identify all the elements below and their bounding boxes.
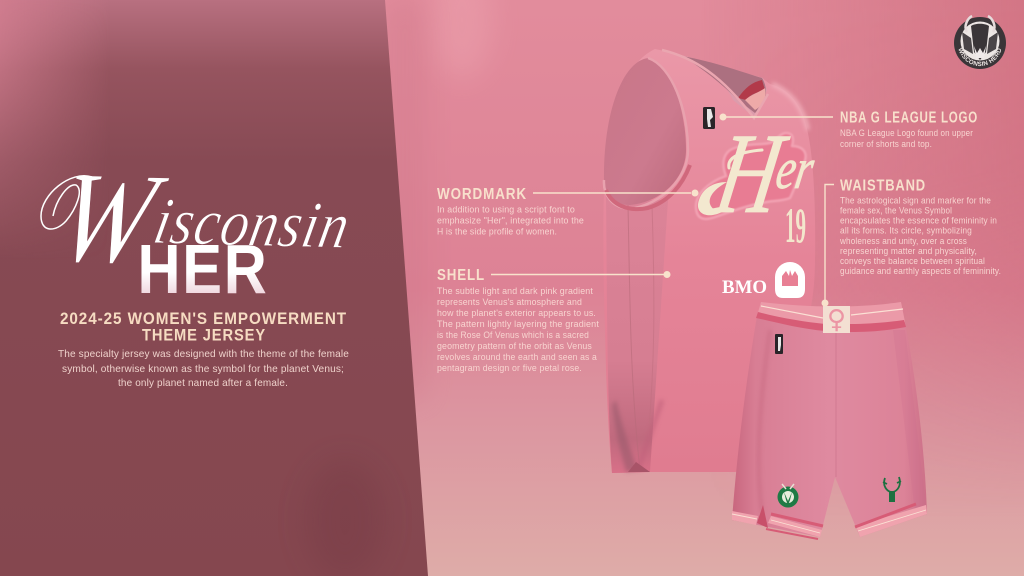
callout: shell: SHELL xyxy=(437,267,485,284)
collar xyxy=(655,49,767,118)
intro paragraph xyxy=(58,349,349,389)
shorts body xyxy=(732,316,927,537)
G League patch on jersey xyxy=(703,107,715,129)
Her wordmark: er xyxy=(772,137,819,202)
jersey hem shading xyxy=(612,400,638,472)
Bucks deer logo xyxy=(883,477,901,502)
jersey side panel xyxy=(606,190,668,473)
title: Wisconsin script: W xyxy=(46,146,176,291)
armhole xyxy=(604,58,686,205)
callout: shell xyxy=(437,267,599,373)
intro paragraph: symbol, otherwise known as the symbol for the planet Venus; xyxy=(62,364,344,375)
callout: waistband: female sex, the Venus Symbol xyxy=(840,206,952,216)
leader: wordmark xyxy=(533,190,698,196)
callout: G League logo xyxy=(840,110,978,149)
jersey xyxy=(603,49,824,473)
BMO sponsor: BMO xyxy=(722,277,767,298)
callout: G League logo: NBA G League Logo found on upper xyxy=(840,128,973,138)
jersey: 19 xyxy=(785,197,806,253)
leader: G League logo xyxy=(720,114,833,120)
Bucks round logo xyxy=(778,484,798,508)
callout: shell: The pattern lightly layering the gradient xyxy=(437,319,599,329)
callout: waistband xyxy=(839,178,1001,276)
right shoulder highlight xyxy=(772,84,808,130)
Her wordmark xyxy=(696,111,824,238)
team logo: Wisconsin Herd: WISCONSIN HERD xyxy=(958,48,1001,66)
panel: left dark intro panel xyxy=(0,0,428,576)
callout: waistband: conveys the balance between spiritual xyxy=(840,256,985,266)
shorts xyxy=(732,302,927,539)
callout: waistband: all its forms. Its circle, symbolizing xyxy=(840,226,972,236)
callout: shell: geometry pattern of the orbit as Venus xyxy=(437,341,592,351)
callout: waistband: wholeness and unity, over a cross xyxy=(839,236,967,246)
callout: waistband: encapsulates the essence of femininity in xyxy=(840,216,997,226)
callout: G League logo: NBA G LEAGUE LOGO xyxy=(840,110,978,127)
callout: shell: is the Rose Of Venus which is a sacred xyxy=(437,330,589,340)
BMO sponsor xyxy=(722,262,805,298)
callout: shell: how the planet's exterior appears to us. xyxy=(437,308,596,318)
callout: waistband: The astrological sign and marker for the xyxy=(840,195,991,205)
Her wordmark: H xyxy=(706,111,796,238)
background xyxy=(397,0,1024,576)
callout: wordmark: H is the side profile of women. xyxy=(437,227,557,237)
callout: wordmark: emphasize "Her", integrated into the xyxy=(437,216,584,226)
jersey body xyxy=(603,49,815,473)
title: Wisconsin script: isconsin xyxy=(148,185,357,263)
venus symbol tag: ♀ xyxy=(827,305,846,335)
callout: shell: pentagram design or five petal rose. xyxy=(437,363,582,373)
callout: waistband: WAISTBAND xyxy=(840,178,926,195)
callout: wordmark xyxy=(437,186,584,237)
waistband xyxy=(757,302,905,326)
callout: shell: The subtle light and dark pink gradient xyxy=(437,286,593,296)
callout: wordmark: In addition to using a script font to xyxy=(437,205,575,215)
leg hems xyxy=(732,511,758,525)
callout: shell: revolves around the earth and seen as a xyxy=(437,352,597,362)
subtitle: 2024-25 WOMEN'S EMPOWERMENT xyxy=(60,310,347,328)
leader: waistband xyxy=(822,184,834,306)
title: Wisconsin script xyxy=(41,146,364,296)
G League patch on shorts xyxy=(775,334,783,354)
intro paragraph: the only planet named after a female. xyxy=(118,378,288,389)
intro paragraph: The specialty jersey was designed with the theme of the female xyxy=(58,349,349,360)
callout: G League logo: corner of shorts and top. xyxy=(840,139,932,149)
callout: waistband: guidance and earthly aspects of femininity. xyxy=(840,266,1001,276)
team logo: Wisconsin Herd xyxy=(954,15,1006,69)
title: HER: HER xyxy=(138,230,268,308)
leader: shell xyxy=(491,271,670,278)
callout: shell: represents Venus's atmosphere and xyxy=(437,297,582,307)
subtitle xyxy=(60,310,347,344)
subtitle: THEME JERSEY xyxy=(142,326,266,344)
callout: waistband: representing matter and physicality, xyxy=(840,246,977,256)
callout: wordmark: WORDMARK xyxy=(437,186,527,203)
